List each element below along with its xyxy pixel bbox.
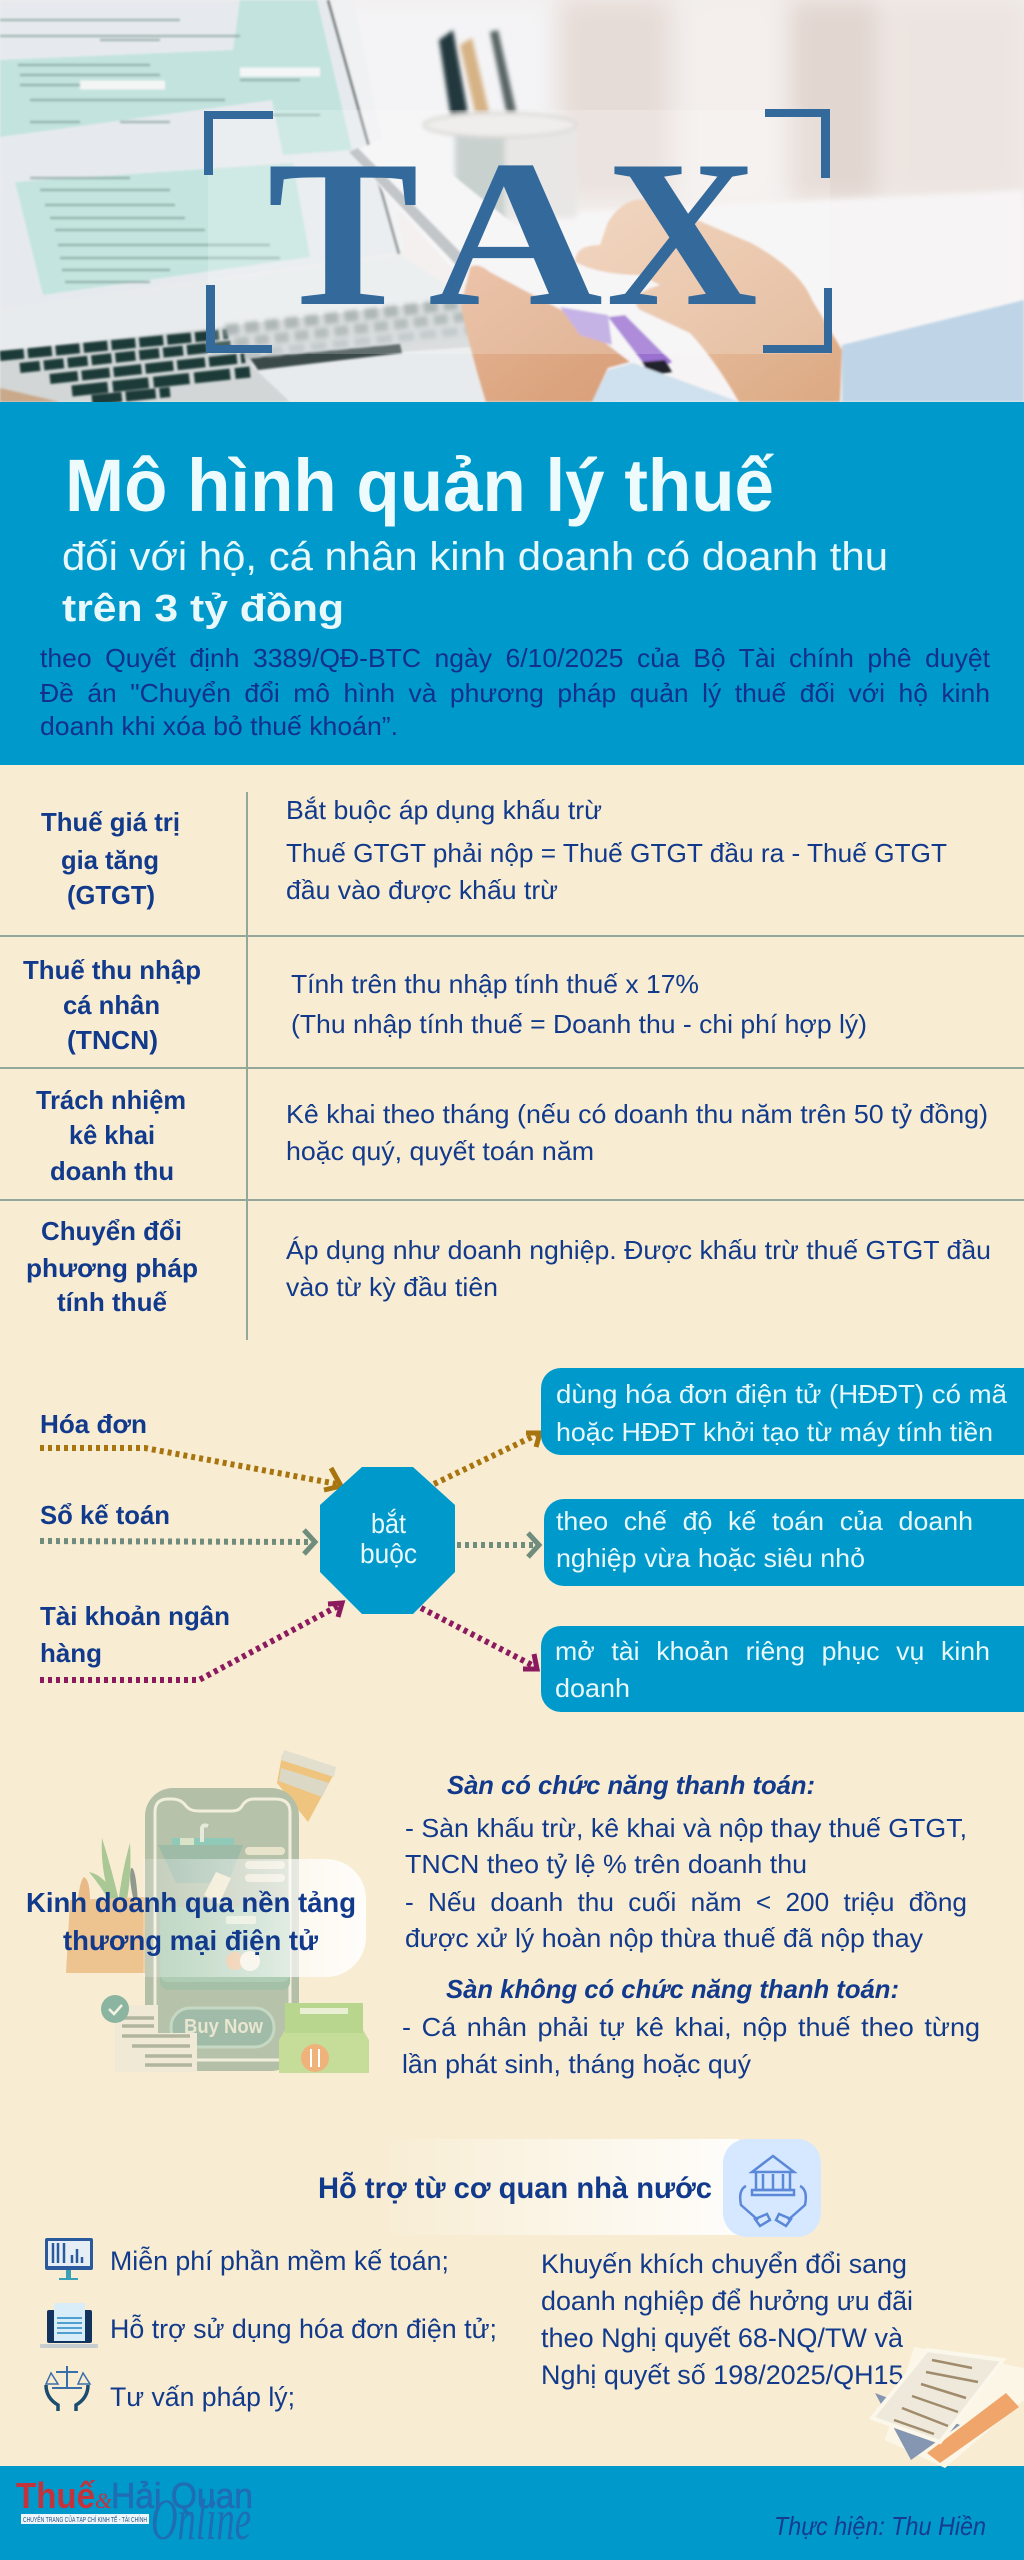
payment-enabled platforms: - Nếu doanh thu cuối năm < 200 triệu đồng xyxy=(405,1887,967,1917)
icon: bank in hands xyxy=(723,2139,821,2237)
credit: Thực hiện: Thu Hiền xyxy=(774,2511,986,2541)
left labels: Tài khoản ngân xyxy=(40,1601,230,1631)
label pill xyxy=(26,1859,366,1977)
encouragement text xyxy=(541,2249,913,2390)
box: accounting regime xyxy=(544,1499,1024,1586)
payment-enabled platforms: - Sàn khấu trừ, kê khai và nộp thay thuế GTGT, xyxy=(405,1813,967,1843)
logo: Thuế & Hải Quan Online: CHUYÊN TRANG CỦA TẠP CHÍ KINH TẾ - TÀI CHÍNH xyxy=(23,2514,147,2524)
row: TNCN: Tính trên thu nhập tính thuế x 17% xyxy=(291,969,699,999)
food box xyxy=(279,2003,369,2073)
payment-enabled platforms xyxy=(405,1770,967,1953)
label pill: Kinh doanh qua nền tảng xyxy=(26,1887,356,1918)
arrow: invoice in xyxy=(40,1448,341,1490)
box: e-invoice: hoặc HĐĐT khởi tạo từ máy tính tiền xyxy=(556,1417,993,1447)
left labels: hàng xyxy=(40,1638,102,1668)
logo: Thuế & Hải Quan Online: Online xyxy=(151,2487,251,2552)
cup xyxy=(277,1750,336,1822)
row: GTGT: (GTGT) xyxy=(67,880,155,910)
left labels: Hóa đơn xyxy=(40,1409,147,1439)
payment-enabled platforms: Sàn có chức năng thanh toán: xyxy=(447,1770,815,1800)
payment-enabled platforms: TNCN theo tỷ lệ % trên doanh thu xyxy=(405,1849,807,1879)
non-payment platforms: lần phát sinh, tháng hoặc quý xyxy=(402,2049,751,2079)
box: accounting regime: theo chế độ kế toán của doanh xyxy=(556,1506,973,1536)
title panel xyxy=(0,402,1024,765)
row: GTGT: đầu vào được khấu trừ xyxy=(286,875,558,905)
octagon: mandatory: bắt xyxy=(371,1508,406,1539)
box: e-invoice: dùng hóa đơn điện tử (HĐĐT) có mã xyxy=(556,1379,1008,1409)
non-payment platforms: - Cá nhân phải tự kê khai, nộp thuế theo từng xyxy=(402,2012,980,2042)
arrow: bank account out xyxy=(421,1608,537,1669)
encouragement text: Nghị quyết số 198/2025/QH15. xyxy=(541,2360,911,2390)
label pill: thương mại điện tử xyxy=(63,1925,319,1956)
TAX word: X xyxy=(606,118,758,350)
header photo: laptop and hands holding tablet xyxy=(0,0,1024,402)
row: TNCN xyxy=(23,955,867,1055)
box: bank account xyxy=(541,1626,1024,1712)
box: bank account: doanh xyxy=(555,1673,630,1703)
row: TNCN: Thuế thu nhập xyxy=(23,955,201,985)
illustration: shopping phone xyxy=(66,1750,369,2073)
box: e-invoice xyxy=(541,1368,1024,1455)
basket xyxy=(158,1825,285,1904)
left labels xyxy=(40,1409,230,1668)
icon: scales in hands xyxy=(46,2366,90,2411)
row: declaration: kê khai xyxy=(69,1120,155,1150)
buy now button: Buy Now xyxy=(184,2016,263,2038)
non-payment platforms xyxy=(402,1974,980,2079)
box: bank account: mở tài khoản riêng phục vụ kinh xyxy=(555,1636,990,1666)
logo: Thuế & Hải Quan Online: Hải Quan xyxy=(111,2475,253,2516)
text: free software: Miễn phí phần mềm kế toán; xyxy=(110,2245,449,2276)
arrow: invoice out xyxy=(434,1433,540,1484)
arrow: bank account in xyxy=(40,1603,342,1680)
icon: monitor xyxy=(45,2238,93,2280)
receipt xyxy=(115,2005,197,2072)
row: method change: tính thuế xyxy=(57,1287,168,1317)
row: method change: Chuyển đổi xyxy=(41,1216,182,1246)
row: method change: phương pháp xyxy=(26,1253,198,1283)
octagon: mandatory: buộc xyxy=(360,1538,417,1569)
e-commerce section xyxy=(26,1750,980,2079)
encouragement text: doanh nghiệp để hưởng ưu đãi xyxy=(541,2286,913,2316)
box: accounting regime: nghiệp vừa hoặc siêu nhỏ xyxy=(556,1543,865,1573)
subtitle: đối với hộ, cá nhân kinh doanh có doanh thu xyxy=(62,535,888,579)
arrow: ledger out xyxy=(457,1533,539,1557)
buy now button xyxy=(171,2008,274,2047)
support section heading xyxy=(318,2139,739,2235)
row: GTGT: Thuế giá trị xyxy=(41,807,180,837)
TAX word xyxy=(267,118,758,350)
row: GTGT: gia tăng xyxy=(61,845,159,875)
row: method change: vào từ kỳ đầu tiên xyxy=(286,1272,498,1302)
encouragement text: Khuyến khích chuyển đổi sang xyxy=(541,2249,907,2279)
row: method change: Áp dụng như doanh nghiệp. Được khấu trừ thuế GTGT đầu xyxy=(286,1235,991,1265)
row: TNCN: (TNCN) xyxy=(67,1025,158,1055)
TAX word: A xyxy=(428,118,603,350)
TAX word: T xyxy=(267,118,419,350)
row: declaration: Trách nhiệm xyxy=(36,1085,186,1115)
logo: Thuế & Hải Quan Online: Thuế xyxy=(16,2475,96,2516)
flow diagram xyxy=(40,1368,1024,1712)
left labels: Sổ kế toán xyxy=(40,1500,170,1530)
translucent panel behind TAX xyxy=(208,110,830,354)
screen card xyxy=(160,1907,290,1990)
icon: laptop invoice xyxy=(40,2303,98,2348)
intro paragraph: Đề án "Chuyển đổi mô hình và phương pháp quản lý thuế đối với hộ kinh xyxy=(40,678,990,708)
subtitle: trên 3 tỷ đồng xyxy=(62,588,344,630)
main title: Mô hình quản lý thuế xyxy=(65,444,775,527)
row: GTGT xyxy=(41,795,947,910)
octagon: mandatory xyxy=(320,1467,455,1614)
phone body xyxy=(145,1788,299,2071)
footer bar xyxy=(0,2466,1024,2560)
badge xyxy=(101,1995,129,2023)
tax table xyxy=(0,792,1024,1340)
intro paragraph: theo Quyết định 3389/QĐ-BTC ngày 6/10/2025 của Bộ Tài chính phê duyệt xyxy=(40,643,991,673)
text: e-invoice support: Hỗ trợ sử dụng hóa đơn điện tử; xyxy=(110,2313,497,2344)
row: GTGT: Bắt buộc áp dụng khấu trừ xyxy=(286,795,602,825)
corner brackets around TAX xyxy=(204,109,832,353)
payment-enabled platforms: được xử lý hoàn nộp thừa thuế đã nộp thay xyxy=(405,1923,923,1953)
text: legal advice: Tư vấn pháp lý; xyxy=(110,2382,295,2412)
row: TNCN: (Thu nhập tính thuế = Doanh thu - chi phí hợp lý) xyxy=(291,1009,867,1039)
intro paragraph: doanh khi xóa bỏ thuế khoán”. xyxy=(40,711,398,741)
logo: Thuế & Hải Quan Online: & xyxy=(95,2488,113,2513)
row: declaration: hoặc quý, quyết toán năm xyxy=(286,1136,594,1166)
intro paragraph xyxy=(40,643,991,741)
row: GTGT: Thuế GTGT phải nộp = Thuế GTGT đầu ra - Thuế GTGT xyxy=(286,838,947,868)
row: method change xyxy=(26,1216,991,1317)
logo: Thuế & Hải Quan Online xyxy=(16,2475,253,2552)
illustration: stack of papers xyxy=(872,2347,1024,2468)
left bag, bread and leaves xyxy=(66,1838,145,1973)
arrow: ledger in xyxy=(40,1530,315,1554)
row: declaration xyxy=(36,1085,988,1186)
support section heading: Hỗ trợ từ cơ quan nhà nước xyxy=(318,2171,712,2205)
row: TNCN: cá nhân xyxy=(63,990,160,1020)
non-payment platforms: Sàn không có chức năng thanh toán: xyxy=(446,1974,899,2004)
row: declaration: Kê khai theo tháng (nếu có doanh thu năm trên 50 tỷ đồng) xyxy=(286,1099,988,1129)
row: declaration: doanh thu xyxy=(50,1156,174,1186)
encouragement text: theo Nghị quyết 68-NQ/TW và xyxy=(541,2323,904,2353)
support list xyxy=(40,2238,497,2412)
subtitle xyxy=(62,535,888,630)
